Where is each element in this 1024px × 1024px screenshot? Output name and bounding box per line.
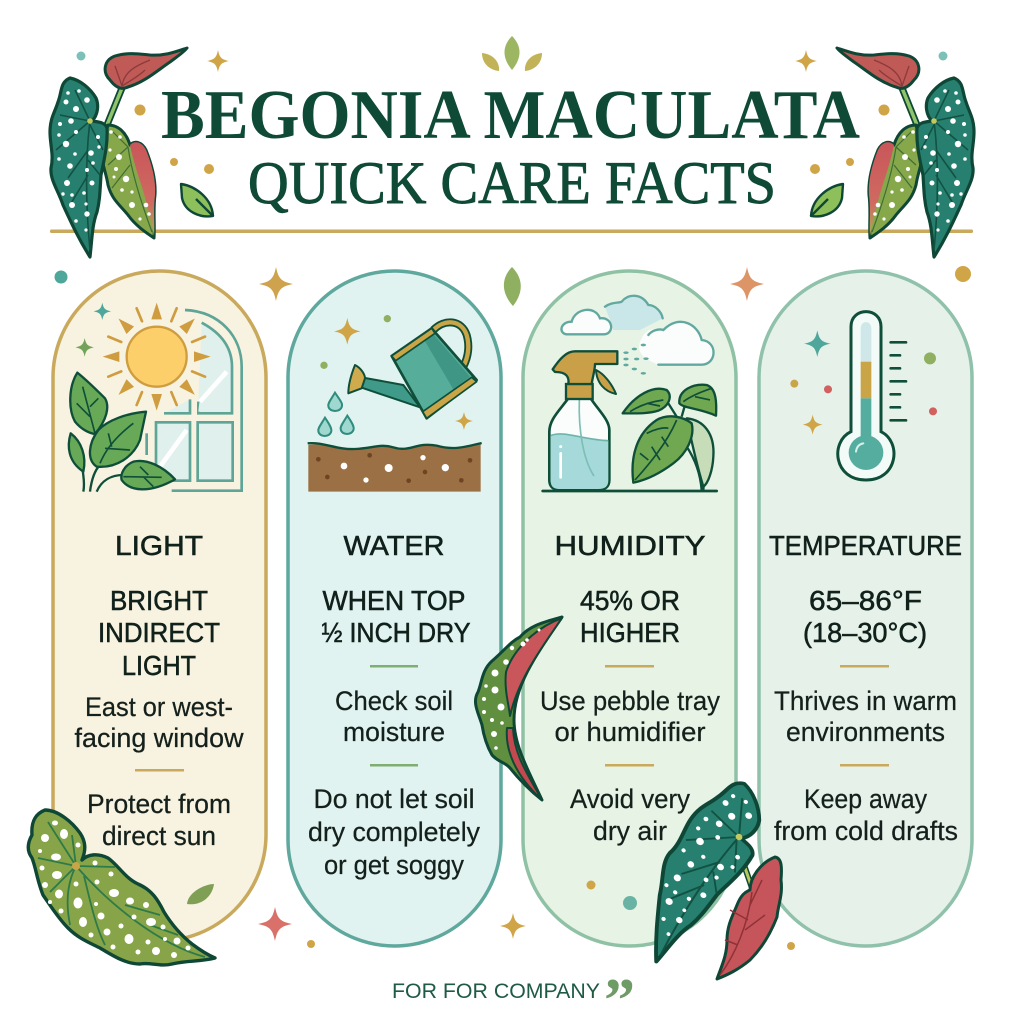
text: light panel: direct sun [102,821,216,851]
handle [433,322,468,367]
soil [308,443,481,492]
plant [69,373,175,492]
text: humidity panel: HUMIDITY [554,530,706,561]
text: water panel: Check soil [335,686,453,716]
decoration: left header begonia cluster [50,48,229,257]
title line one: BEGONIA MACULATA [161,77,860,154]
icon: top centre leaves [482,36,542,71]
can body [392,328,477,418]
icon: spray bottle, clouds and plant [543,296,717,491]
icon: watering can over soil [308,315,482,492]
drops [318,393,354,436]
text: light panel [74,530,244,851]
text: light panel: INDIRECT [98,617,220,648]
panel: temperature background [759,271,972,946]
illustration: curved begonia leaf between water and humidity panels [475,617,562,800]
title [161,77,860,216]
text: water panel [308,530,480,880]
bottle [549,398,609,490]
text: humidity panel: dry air [593,816,667,846]
text: temperature panel: Keep away [804,784,927,814]
plant [623,385,716,490]
text: temperature panel: 65–86°F [809,585,922,616]
text: temperature panel: Thrives in warm [774,686,957,716]
panel: humidity background [523,271,736,946]
sun [103,303,211,411]
decoration: sparkles between panels [54,266,971,950]
text: water panel: WATER [344,530,444,561]
text: humidity panel: Use pebble tray [540,686,720,716]
text: humidity panel: 45% OR [580,585,680,616]
text: humidity panel: or humidifier [554,717,706,747]
text: water panel: or get soggy [324,850,464,880]
illustration: red begonia leaf, bottom right [717,857,781,979]
illustration: large green begonia leaf, bottom left [28,810,215,965]
clouds [561,296,714,365]
shelf line [543,487,717,495]
text: light panel: Protect from [87,789,231,819]
text: temperature panel: (18–30°C) [803,617,927,648]
title line two: QUICK CARE FACTS [248,150,776,216]
text: water panel: WHEN TOP [322,585,466,616]
decoration: right header begonia cluster [795,48,974,257]
header rule [50,230,973,233]
text: humidity panel: Avoid very [570,784,690,814]
text: water panel: dry completely [308,817,480,847]
footer text: FOR FOR COMPANY [392,980,600,1003]
text: light panel: LIGHT [122,650,196,681]
panel: water background [288,271,501,946]
text: temperature panel [769,530,962,846]
spout [361,377,420,407]
illustration: teal begonia leaf, bottom right [615,770,783,973]
text: light panel: facing window [74,723,244,753]
text: humidity panel [540,530,720,846]
text: light panel: LIGHT [115,530,203,561]
window [147,310,242,491]
text: light panel: East or west- [85,692,233,722]
icon: sun and window with plant [69,303,242,492]
text: temperature panel: from cold drafts [774,816,958,846]
text: water panel: ½ INCH DRY [322,617,471,648]
spray mist [623,344,649,375]
footer text [392,967,635,1024]
text: humidity panel: HIGHER [580,617,680,648]
text: water panel: moisture [343,717,445,747]
icon: thermometer [790,312,937,480]
text: light panel: BRIGHT [110,585,208,616]
text: water panel: Do not let soil [314,784,474,814]
panel: light background [53,271,266,941]
text: temperature panel: TEMPERATURE [769,530,962,561]
text: temperature panel: environments [786,717,945,747]
